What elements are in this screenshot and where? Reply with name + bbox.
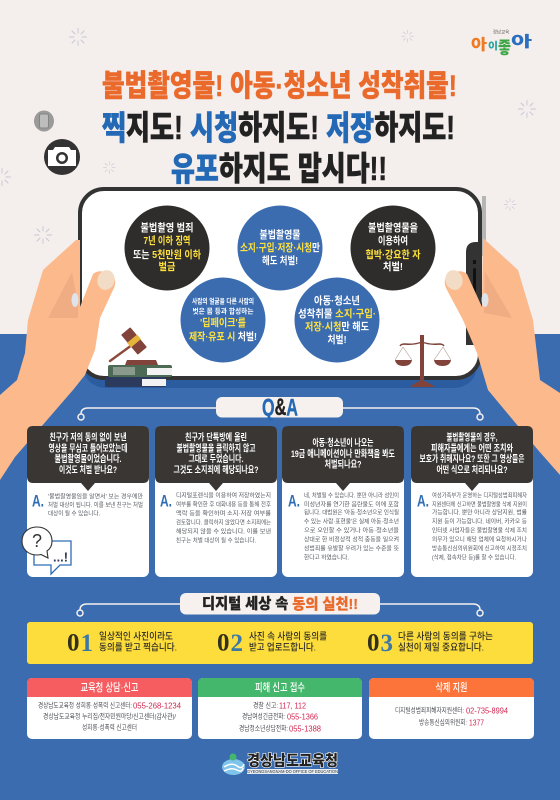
title line: second headline: 찍지도! 시청하지도! 저장하지도!	[102, 109, 455, 146]
circle: penalty	[124, 206, 210, 290]
panel: question 4: 불법촬영물의 경우,	[446, 432, 498, 444]
consent connector lines	[77, 604, 483, 616]
step 01: 동의를 받고 찍습니다.	[99, 642, 177, 654]
panel: question 3: 으로 오인할 수 있거나 아동·청소년을	[304, 526, 399, 534]
panel: question 4: 방송통신심의위원회에 신고하여 시정조치	[432, 544, 527, 552]
panel: question 3: 처벌되나요?	[324, 458, 362, 470]
panel: victim report	[198, 678, 362, 739]
panel: question 3: 수 있는 사람·표현물'은 실제 아동·청소년	[304, 518, 399, 526]
icon: camera badge	[44, 139, 80, 175]
panel: question 4: 인터넷 사업자들은 불법촬영물 삭제 조치	[432, 526, 527, 534]
circle: penalty: 벌금	[158, 260, 176, 273]
panel: question 3: 네, 처벌될 수 있습니다. 뿐만 아니라 성인이	[304, 492, 399, 500]
panel: question 4	[411, 426, 533, 577]
circle: coercion: 처벌!	[383, 260, 403, 273]
circle: minors	[294, 278, 380, 362]
panel: question 2: A.	[160, 492, 172, 510]
panel: deletion support: 디지털성범죄피해자지원센터:	[395, 706, 464, 714]
circle: penalty: 7년 이하 징역	[144, 234, 190, 247]
circle: coercion: 이용하여	[378, 234, 408, 247]
thumbnail	[95, 268, 117, 292]
icon: scales	[395, 335, 451, 387]
circle: minors: 저장·시청만 해도	[305, 320, 369, 333]
panel: question 1: '불법촬영물임을 알면서' 보는 경우에만	[48, 492, 143, 500]
icon: question speech bubbles	[22, 527, 71, 574]
circle: deepfake: 사람의 얼굴을 다른 사람의	[192, 296, 254, 306]
panel: victim report: 055-1388	[289, 724, 322, 734]
circle: deepfake: '딥페이크'를	[200, 316, 246, 329]
step 02: 받고 업로드합니다.	[249, 642, 316, 654]
logo: 아이좋아: 이	[488, 40, 498, 52]
panel: question 3: 상대로 한 비정상적 성적 충동을 일으켜	[304, 536, 399, 544]
panel: question 2: 불법촬영물을 클릭하지 않고	[176, 442, 256, 454]
panel: question 2: 맥락 등을 확인하며 소지·저장 여부를	[176, 510, 271, 518]
panel: victim report: 피해 신고 접수	[255, 681, 305, 694]
step 02: 02	[217, 630, 243, 656]
step 01: 일상적인 사진이라도	[99, 630, 173, 642]
panel: question 1: 친구가 저의 동의 없이 보낸	[50, 432, 127, 444]
panel: deletion support: 1377	[469, 718, 484, 728]
title line: third headline: 유포하지도 맙시다!!	[171, 150, 387, 187]
logo: 아이좋아: 아	[511, 34, 532, 50]
panel: question 3: 미성년자를 연기한 음란물도 이에 포함	[304, 500, 399, 508]
panel: question 4: 가능합니다. 뿐만 아니라 상담지원, 법률	[432, 508, 527, 516]
panel: question 1: 처벌 대상이 됩니다. 이를 보낸 친구는 처벌	[48, 501, 143, 509]
icon: gavel and books	[105, 327, 172, 387]
step 03: 03	[367, 630, 393, 656]
panel: education office report: 경상남도교육청 누리집/전자민원마당/신고센터(감사관)/	[43, 712, 176, 720]
panel: victim report: 117, 112	[279, 702, 306, 710]
panel: question 4: 의무가 있으니 해당 업체에 요청하시거나	[432, 536, 527, 544]
step 02	[217, 630, 327, 656]
panel: question 4: 지원센터에 신고하면 불법촬영물 삭제 지원이	[432, 500, 527, 508]
logo: 아이좋아	[471, 28, 532, 58]
panel: victim report: 055-1366	[287, 712, 319, 722]
icon: question speech bubbles: ...!	[53, 550, 68, 564]
circle: minors: 아동·청소년	[314, 294, 360, 307]
panel: question 3: 됩니다. 대법원은 '아동·청소년으로 인식될	[304, 508, 399, 516]
panel: deletion support	[369, 678, 534, 739]
panel: deletion support: 방송통신심의위원회:	[419, 718, 467, 726]
panel: question 1: 불법촬영물이었습니다.	[54, 453, 122, 465]
icon: question speech bubbles: ?	[32, 531, 42, 551]
panel: question 4: (삭제, 접속차단 등)를 할 수 있습니다.	[432, 554, 516, 562]
footer logo: Gyeongsangnam-do Office of Education: 경상남도교육청	[247, 752, 338, 770]
panel: victim report: 경찰 신고:	[253, 700, 278, 710]
circle: penalty: 불법촬영 범죄	[140, 221, 194, 234]
logo: 아이좋아: 아	[471, 36, 487, 54]
logo: 아이좋아: 경남교육	[493, 28, 509, 36]
panel: question 2: 해당되지 않을 수 있습니다. 이를 보낸	[176, 528, 271, 536]
step 03	[367, 630, 493, 656]
circle: possession: 불법촬영물	[260, 228, 301, 241]
panel: education office report: 경상남도교육청 성희롱·성폭력 신고센터:	[38, 700, 132, 710]
circle: coercion	[350, 206, 436, 290]
logo: 아이좋아: 좋	[498, 38, 511, 58]
title line: orange headline: 불법촬영물! 아동·청소년 성착취물!	[102, 70, 457, 103]
circle: coercion: 협박·강요한 자	[366, 248, 421, 261]
panel: question 4: 피해자들에게는 어떤 조치와	[431, 442, 513, 454]
panel: question 3: 아동·청소년이 나오는	[312, 437, 374, 449]
circle: deepfake	[180, 278, 266, 362]
panel: question 2: 그것도 소지죄에 해당되나요?	[174, 464, 259, 476]
panel: education office report: 055-268-1234	[133, 702, 182, 710]
heading: digital consent: 디지털 세상 속 동의 실천!!	[202, 596, 358, 612]
panel: deletion support: 02-735-8994	[466, 706, 509, 716]
panel: question 2: 그대로 두었습니다.	[188, 453, 244, 465]
circle: penalty: 또는 5천만원 이하	[133, 248, 201, 261]
panel: question 2: 여부를 확인한 후 대화내용 등을 통해 전후	[176, 500, 271, 508]
panel: question 3: A.	[288, 492, 300, 510]
thumbnail	[443, 268, 465, 292]
panel: question 3	[282, 426, 404, 577]
right hand	[443, 238, 560, 475]
footer logo: Gyeongsangnam-do Office of Education	[222, 752, 338, 775]
circle: deepfake: 제작·유포 시 처벌!	[189, 330, 257, 343]
footer logo: Gyeongsangnam-do Office of Education: GYEONGSANGNAM-DO OFFICE OF EDUCATION	[247, 769, 338, 774]
panel: question 1	[22, 426, 149, 577]
circle: coercion: 불법촬영물을	[368, 221, 418, 234]
circle: minors: 성착취물 소지·구입·	[298, 307, 376, 320]
step 02: 사진 속 사람의 동의를	[249, 630, 327, 642]
step 03: 실천이 제일 중요합니다.	[398, 642, 484, 654]
panel: question 4: 여성가족부가 운영하는 디지털성범죄피해자	[432, 492, 527, 500]
icon: phone badge	[34, 110, 54, 132]
left hand	[0, 240, 117, 480]
circle: minors: 처벌!	[328, 333, 346, 346]
panel: question 1: 이것도 처벌 받나요?	[59, 464, 117, 476]
panel: question 2: 검토합니다. 클릭하지 않았다면 소지죄에는	[176, 518, 271, 526]
panel: question 1: 영상을 무심코 틀어보았는데	[48, 442, 128, 454]
circle: deepfake: 벗은 몸 등과 합성하는	[192, 306, 254, 316]
panel: question 4: A.	[417, 492, 429, 510]
circle: possession	[238, 206, 322, 290]
panel: question 3: 성범죄를 유발할 우려가 있는 수준을 뜻	[304, 544, 399, 552]
heading: Q&A: Q&A	[262, 394, 298, 421]
phone	[80, 189, 486, 388]
panel: question 3: 19금 애니메이션이나 만화책을 봐도	[291, 448, 395, 460]
panel: question 2: 디지털포렌식을 이용하여 저장하였는지	[176, 492, 271, 500]
Q&A connector lines	[78, 408, 483, 420]
panel: question 2	[155, 426, 277, 577]
circle: possession: 소지·구입·저장·시청만	[240, 241, 320, 254]
step 01	[67, 630, 177, 656]
panel: education office report: 교육청 상담·신고	[80, 681, 138, 694]
panel: question 4: 어떤 식으로 처리되나요?	[436, 464, 508, 476]
panel: deletion support: 삭제 지원	[436, 680, 468, 694]
panel: question 4: 지원 등이 가능합니다. 네이버, 카카오 등	[432, 518, 527, 526]
circle: possession: 해도 처벌!	[262, 254, 298, 267]
panel: education office report: 성희롱·성폭력 신고센터	[82, 722, 137, 732]
panel: consent practice	[27, 622, 533, 664]
panel: education office report	[27, 678, 192, 739]
panel: victim report: 경남여성긴급전화:	[242, 712, 285, 720]
panel: question 1: A.	[32, 492, 44, 510]
heading: Q&A	[216, 394, 343, 421]
panel: question 3: 한다고 하였습니다.	[304, 554, 349, 562]
panel: victim report: 경남청소년상담전화:	[239, 724, 288, 732]
step 03: 다른 사람의 동의를 구하는	[398, 630, 493, 642]
panel: question 1: 대상이 될 수 있습니다.	[48, 510, 100, 518]
panel: question 2: 친구는 처벌 대상이 될 수 있습니다.	[176, 536, 256, 544]
panel: question 2: 친구가 단톡방에 올린	[185, 432, 247, 444]
step 01: 01	[67, 630, 93, 656]
heading: digital consent	[180, 593, 380, 614]
